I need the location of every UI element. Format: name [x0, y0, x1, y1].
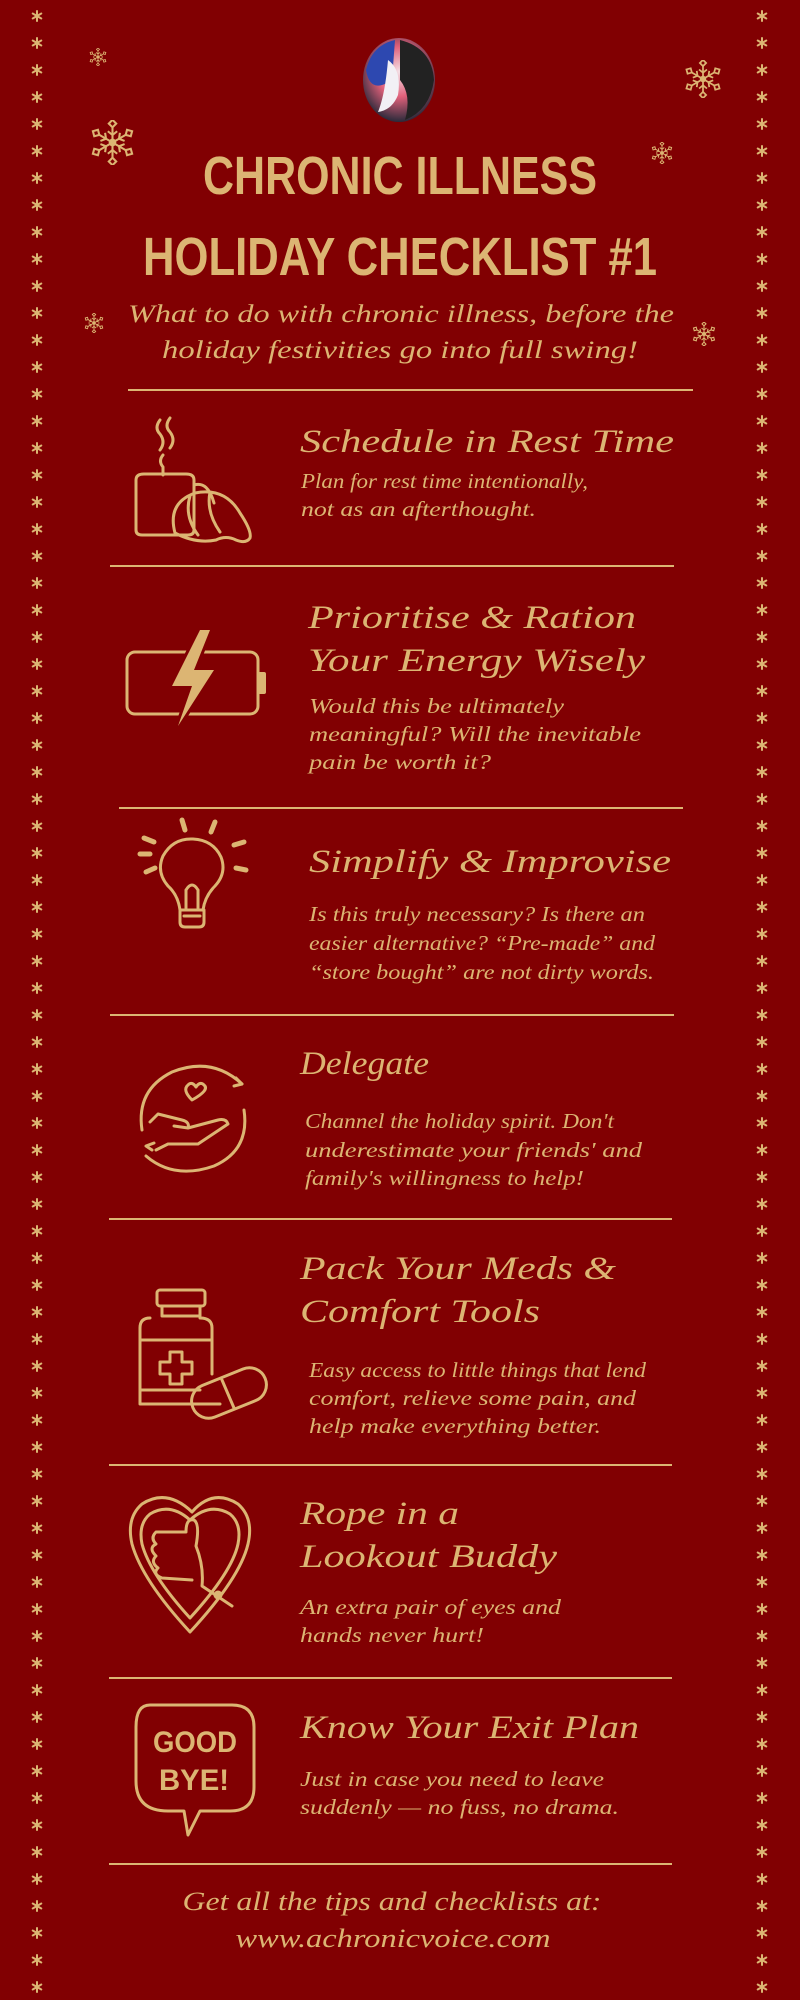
- description: [308, 902, 656, 984]
- description: Plan for rest time intentionally,: [300, 469, 588, 493]
- description: Is this truly necessary? Is there an: [308, 902, 645, 926]
- description: comfort, relieve some pain, and: [309, 1386, 637, 1410]
- description: [300, 1767, 619, 1819]
- description: family's willingness to help!: [305, 1166, 584, 1190]
- icon: cup and croissant: [136, 418, 250, 542]
- section: simplify: [140, 820, 671, 984]
- description: An extra pair of eyes and: [298, 1595, 562, 1619]
- description: [300, 469, 588, 521]
- description: hands never hurt!: [300, 1623, 484, 1647]
- icon: hand with heart: [141, 1066, 245, 1171]
- heading: Your Energy Wisely: [308, 643, 645, 679]
- title: HOLIDAY CHECKLIST #1: [143, 227, 657, 287]
- description: suddenly — no fuss, no drama.: [300, 1795, 619, 1819]
- description: Just in case you need to leave: [300, 1767, 604, 1791]
- section: exit plan: [136, 1705, 639, 1835]
- icon: goodbye speech bubble: BYE!: [159, 1764, 229, 1797]
- section: delegate: [141, 1046, 643, 1190]
- title: [143, 146, 657, 287]
- icon: goodbye speech bubble: [136, 1705, 254, 1835]
- icon: medicine bottle and pill: [140, 1290, 272, 1423]
- heading: Prioritise & Ration: [307, 600, 636, 636]
- description: [298, 1595, 562, 1647]
- heading: Delegate: [299, 1046, 429, 1082]
- subtitle: [128, 301, 674, 364]
- section: rest time: [136, 418, 674, 542]
- description: [305, 1109, 643, 1190]
- description: Would this be ultimately: [309, 694, 565, 718]
- title: CHRONIC ILLNESS: [203, 146, 597, 206]
- snowflakes: [84, 48, 722, 346]
- icon: heart with thumbs up: [130, 1498, 250, 1632]
- heading: Simplify & Improvise: [309, 844, 671, 880]
- heading: [307, 600, 645, 679]
- description: Channel the holiday spirit. Don't: [305, 1109, 615, 1133]
- icon: battery: [127, 630, 266, 726]
- section: energy: [127, 600, 645, 774]
- description: “store bought” are not dirty words.: [309, 960, 654, 984]
- subtitle: What to do with chronic illness, before the: [128, 301, 674, 328]
- description: underestimate your friends' and: [305, 1138, 643, 1162]
- heading: Schedule in Rest Time: [300, 424, 674, 460]
- footer: www.achronicvoice.com: [236, 1924, 550, 1953]
- heading: [299, 1496, 557, 1575]
- heading: Pack Your Meds &: [299, 1251, 616, 1287]
- section: buddy: [130, 1496, 562, 1647]
- footer: Get all the tips and checklists at:: [182, 1887, 602, 1916]
- subtitle: holiday festivities go into full swing!: [162, 337, 638, 364]
- description: not as an afterthought.: [301, 497, 536, 521]
- description: help make everything better.: [309, 1414, 601, 1438]
- section: meds: [140, 1251, 647, 1438]
- icon: light bulb: [140, 820, 246, 927]
- footer: [182, 1887, 602, 1953]
- description: Easy access to little things that lend: [308, 1358, 647, 1382]
- icon: goodbye speech bubble: GOOD: [153, 1726, 237, 1759]
- logo: [363, 38, 435, 122]
- heading: [299, 1251, 616, 1330]
- heading: Know Your Exit Plan: [299, 1710, 639, 1746]
- description: [306, 694, 641, 774]
- description: [308, 1358, 647, 1438]
- description: meaningful? Will the inevitable: [309, 722, 641, 746]
- heading: Rope in a: [299, 1496, 459, 1532]
- description: easier alternative? “Pre-made” and: [309, 931, 656, 955]
- heading: Lookout Buddy: [299, 1539, 557, 1575]
- description: pain be worth it?: [306, 750, 492, 774]
- heading: Comfort Tools: [300, 1294, 540, 1330]
